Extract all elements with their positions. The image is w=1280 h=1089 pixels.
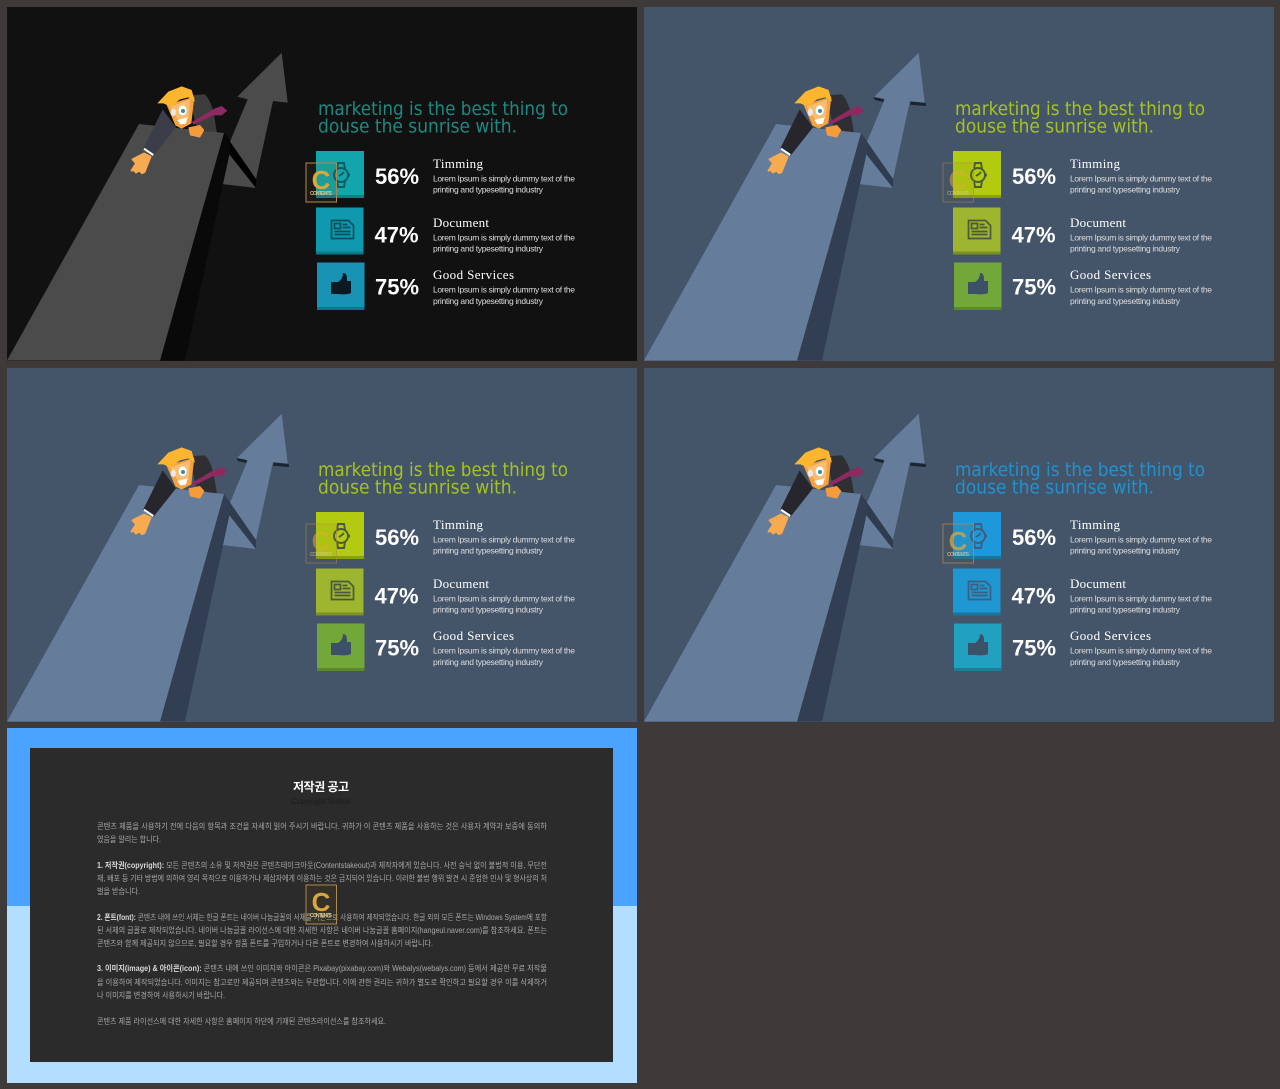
stat row: good services: Good Services: [433, 267, 514, 282]
stat row: document: Lorem Ipsum is simply dummy text of the: [1070, 594, 1212, 604]
stat row: good services: Lorem Ipsum is simply dummy text of the: [433, 284, 575, 294]
businessman figure: [768, 86, 864, 173]
stat row: timming: Lorem Ipsum is simply dummy text of the: [1070, 174, 1212, 184]
stat row: good services: [317, 624, 575, 671]
stat row: timming: [953, 512, 1212, 559]
stat row: good services: 75%: [375, 274, 419, 300]
businessman figure: [131, 86, 227, 173]
stat row: document: Document: [1070, 576, 1126, 591]
notice footer line: 콘텐츠 제품 라이선스에 대한 자세한 사항은 홈페이지 하단에 기재된 콘텐츠라이선스를 참조하세요.: [97, 1016, 386, 1026]
watermark: C: [312, 526, 331, 556]
notice item: copyright: 벌을 받습니다.: [97, 886, 140, 896]
watermark: CONTENTS: [310, 552, 333, 558]
stat row: good services: printing and typesetting industry: [1070, 296, 1181, 306]
notice subheading: Copyright Notice: [291, 797, 351, 806]
main diagonal shape: [7, 485, 224, 722]
stat row: good services: Good Services: [433, 628, 514, 643]
stat row: timming: Timming: [1070, 517, 1120, 532]
stat row: document: [953, 568, 1212, 616]
notice intro: 였음을 알리는 합니다.: [97, 834, 161, 844]
main diagonal shape: [7, 124, 224, 360]
notice item: copyright: 1. 저작권(copyright): 모든 콘텐츠의 소유 및 저작권은 콘텐츠테이크아웃(Contentstakeout)과 제작자에게 있습니다. 사전 승낙 없이 불법적 이용, 무단전: [97, 860, 547, 870]
stat row: good services: [317, 262, 575, 310]
stat row: document: 47%: [1012, 584, 1056, 608]
stat row: timming: 56%: [375, 525, 419, 550]
notice item: font: 콘텐츠와 함께 제공되지 않으므로, 필요할 경우 정품 폰트를 구입하거나 다른 폰트로 변경하여 사용하시기 바랍니다.: [97, 938, 433, 948]
stat row: good services: Lorem Ipsum is simply dummy text of the: [1070, 646, 1212, 656]
title: marketing is the best thing to: [318, 459, 568, 481]
stat row: timming: 56%: [1012, 164, 1056, 189]
watermark: C: [312, 887, 331, 917]
panel: blue slide with lime accent, middle left: [7, 368, 637, 722]
stat row: document: [316, 208, 575, 254]
notice item: font: [97, 912, 548, 948]
watermark: CONTENTS: [947, 552, 970, 558]
stat row: document: 47%: [374, 222, 419, 248]
panel: blue slide with sky-blue accent, middle right: [644, 368, 1274, 722]
stat row: timming: 56%: [375, 164, 419, 189]
notice item: copyright: [97, 860, 547, 896]
stat row: good services: Good Services: [1070, 628, 1151, 643]
stat row: timming: printing and typesetting industry: [433, 184, 544, 194]
stat row: good services: [954, 262, 1212, 310]
notice item: font: 된 서체의 글꼴로 제작되었습니다. 네이버 나눔글꼴 라이선스에 대한 자세한 사항은 네이버 나눔글꼴 홈페이지(hangeul.naver.com)를 참조하세요. 폰트는: [97, 925, 547, 935]
notice intro: 콘텐츠 제품을 사용하기 전에 다음의 항목과 조건을 자세히 읽어 주시기 바랍니다. 귀하가 이 콘텐츠 제품을 사용하는 것은 사용자 계약과 보증에 동의하: [97, 821, 548, 831]
notice heading: 저작권 공고: [293, 779, 349, 794]
businessman figure: [131, 447, 227, 534]
title: marketing is the best thing to: [955, 98, 1205, 120]
stat row: document: Document: [433, 576, 489, 591]
notice item: image and icon: 3. 이미지(image) & 아이콘(icon): 콘텐츠 내에 쓰인 이미지와 아이콘은 Pixabay(pixabay.com)와 Webalys(webalys.com) 등에서 제공한 무료 저작물: [97, 963, 547, 973]
arrow illustration: [160, 414, 289, 722]
stat row: good services: printing and typesetting industry: [433, 296, 544, 306]
watermark: C: [312, 165, 331, 195]
notice item: image and icon: [97, 963, 547, 1000]
stat row: timming: [953, 151, 1212, 198]
stat row: document: printing and typesetting industry: [1070, 604, 1181, 614]
panel: dark slide: [7, 7, 637, 361]
stat row: timming: printing and typesetting industry: [1070, 546, 1181, 556]
watermark: CONTENTS: [310, 191, 333, 197]
stat row: good services: 75%: [1012, 274, 1056, 300]
notice item: image and icon: 을 이용하여 제작되었습니다. 이미지는 참고로만 제공되며 콘텐츠와는 무관합니다. 이에 관한 권리는 귀하가 별도로 확인하고 필요할 경우 이를 삭제하거: [97, 977, 547, 987]
watermark: [306, 885, 336, 924]
title: douse the sunrise with.: [318, 477, 517, 499]
arrow illustration: [797, 53, 926, 360]
stat row: document: 47%: [374, 584, 419, 608]
stat row: timming: [316, 512, 575, 559]
stat row: timming: Lorem Ipsum is simply dummy text of the: [433, 174, 575, 184]
stat row: document: Lorem Ipsum is simply dummy text of the: [433, 232, 575, 242]
watermark: CONTENTS: [310, 913, 333, 919]
watermark: CONTENTS: [947, 191, 970, 197]
stat row: good services: [954, 624, 1212, 671]
stat row: timming: Timming: [1070, 156, 1120, 171]
stat row: document: Document: [1070, 215, 1126, 230]
stat row: good services: Good Services: [1070, 267, 1151, 282]
stat row: timming: printing and typesetting industry: [433, 546, 544, 556]
title: douse the sunrise with.: [955, 116, 1154, 138]
title: marketing is the best thing to: [955, 459, 1205, 481]
stat row: good services: 75%: [1012, 636, 1056, 660]
watermark: [306, 163, 336, 202]
title: douse the sunrise with.: [318, 116, 517, 138]
main diagonal shape: [644, 485, 861, 722]
stat row: timming: Timming: [433, 517, 484, 532]
stat row: timming: Lorem Ipsum is simply dummy text of the: [433, 534, 575, 544]
stat row: document: printing and typesetting industry: [433, 604, 544, 614]
notice item: image and icon: 나 이미지를 변경하여 사용하시기 바랍니다.: [97, 990, 225, 1000]
stat row: good services: Lorem Ipsum is simply dummy text of the: [433, 646, 575, 656]
stat row: timming: 56%: [1012, 525, 1056, 550]
stat row: document: printing and typesetting industry: [433, 244, 544, 254]
businessman figure: [768, 447, 864, 534]
stat row: document: Lorem Ipsum is simply dummy text of the: [1070, 232, 1212, 242]
stat row: good services: printing and typesetting industry: [433, 657, 544, 667]
watermark: [943, 163, 974, 202]
title: douse the sunrise with.: [955, 477, 1154, 499]
stat row: timming: [316, 151, 575, 198]
stat row: document: Lorem Ipsum is simply dummy text of the: [433, 594, 575, 604]
stat row: timming: printing and typesetting industry: [1070, 184, 1181, 194]
watermark: C: [949, 165, 968, 195]
title: marketing is the best thing to: [318, 98, 568, 120]
panel: copyright notice: [7, 728, 637, 1083]
stat row: document: [316, 568, 575, 616]
stat row: good services: 75%: [375, 636, 419, 660]
notice item: font: 2. 폰트(font): 콘텐츠 내에 쓰인 서체는 한글 폰트는 네이버 나눔글꼴의 서체를 기본으로 사용하여 제작되었습니다. 한글 외의 모든 폰트는 Windows System에 포함: [97, 912, 548, 922]
notice intro: [97, 821, 548, 844]
main diagonal shape: [644, 124, 861, 360]
arrow illustration: [160, 53, 288, 360]
notice item: copyright: 재, 배포 등 기타 방법에 의하여 영리 목적으로 이용하거나 제삼자에게 이용하는 것은 금지되어 있습니다. 이러한 불법 행위 발견 시 준엄한 민사 및 형사상의 처: [97, 873, 547, 883]
panel: blue slide with lime accent, top right: [644, 7, 1274, 361]
stat row: good services: printing and typesetting industry: [1070, 657, 1181, 667]
stat row: timming: Timming: [433, 156, 484, 171]
watermark: [943, 524, 974, 563]
stat row: document: [953, 208, 1212, 254]
stat row: document: 47%: [1012, 222, 1056, 248]
watermark: C: [949, 526, 968, 556]
stat row: timming: Lorem Ipsum is simply dummy text of the: [1070, 534, 1212, 544]
stat row: good services: Lorem Ipsum is simply dummy text of the: [1070, 284, 1212, 294]
stat row: document: printing and typesetting industry: [1070, 244, 1181, 254]
arrow illustration: [797, 414, 926, 722]
stat row: document: Document: [433, 215, 489, 230]
watermark: [306, 524, 336, 563]
